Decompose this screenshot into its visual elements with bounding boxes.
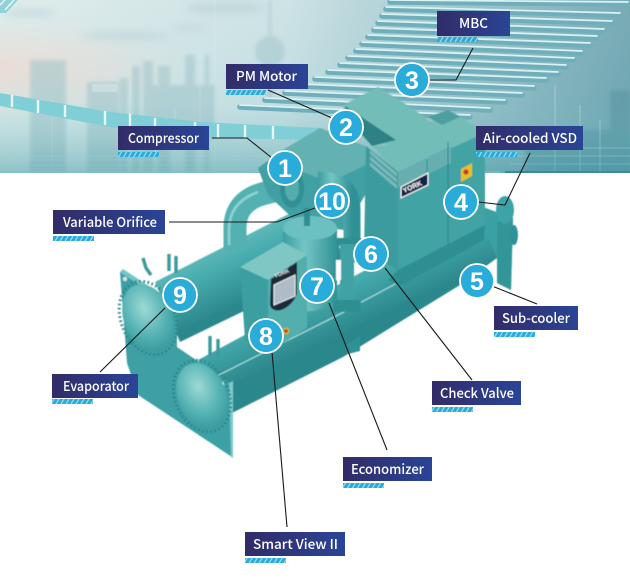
number marker 3 [395,63,429,97]
label: Evaporator [52,374,138,404]
background: city skyline band [0,0,630,173]
compressor body [258,128,368,230]
number marker 4 [444,185,478,219]
label: Check Valve [432,381,521,412]
support foot [346,336,360,354]
discharge pipe [318,180,352,262]
number marker 10: 10 [318,188,346,216]
label: MBC [437,11,510,42]
leader lines [100,48,537,527]
front tube sheet [120,272,232,457]
label: Air-cooled VSD [476,126,583,157]
number marker 8 [249,319,283,353]
label: Evaporator: Evaporator [63,375,129,395]
number marker 5: 5 [470,268,484,296]
number marker 6 [354,237,388,271]
number marker 8: 8 [259,323,273,351]
number marker 10 [315,184,349,218]
label: Smart View II: Smart View II [253,533,338,553]
chiller machine: YORK [274,268,291,280]
York badge [401,173,428,198]
number marker 7: 7 [310,273,324,301]
label: Compressor [118,126,209,157]
number marker 4: 4 [454,189,468,217]
number marker 2 [329,110,363,144]
domes [109,273,187,363]
VSD cabinet right face [398,133,485,270]
VSD cabinet roof [343,87,485,172]
label: Air-cooled VSD: Air-cooled VSD [483,127,577,147]
label: Sub-cooler [494,306,578,337]
label: Compressor: Compressor [128,127,199,147]
number marker 9: 9 [173,282,187,310]
clouds [4,2,265,40]
number marker 5 [460,264,494,298]
economizer vessel [283,222,337,311]
rear tube sheet and flange [483,207,513,290]
VSD cabinet base [388,225,485,286]
label: Check Valve: Check Valve [440,382,514,402]
evaporator shell [155,198,345,342]
valves on evaporator [143,254,176,275]
VSD cabinet left face [364,146,398,270]
elbow pipe [235,188,285,252]
chiller machine [109,87,518,458]
emergency button [283,328,289,334]
label: PM Motor [226,64,308,95]
condenser shell [198,207,497,413]
number marker 7 [300,269,334,303]
number marker 9 [163,278,197,312]
control box [240,242,307,280]
fins: rising stack [240,0,628,117]
bolt holes [123,277,127,281]
label: MBC: MBC [459,12,488,32]
number marker 3: 3 [405,67,419,95]
right side structure [525,90,630,173]
skyline silhouettes [30,0,285,173]
York badge: YORK [402,180,423,195]
label: Smart View II [245,532,345,563]
fins: left ribbon [0,0,320,140]
number marker 1 [268,151,302,185]
number marker 1: 1 [278,155,292,183]
label: PM Motor: PM Motor [236,65,297,85]
label: Variable Orifice: Variable Orifice [62,211,157,231]
label: Economizer [343,457,432,488]
label: Variable Orifice [53,210,165,241]
number marker 6: 6 [364,241,378,269]
number marker 2: 2 [339,114,353,142]
warning switch [461,163,472,182]
label: Sub-cooler: Sub-cooler [502,307,570,327]
label: Economizer: Economizer [351,458,424,478]
